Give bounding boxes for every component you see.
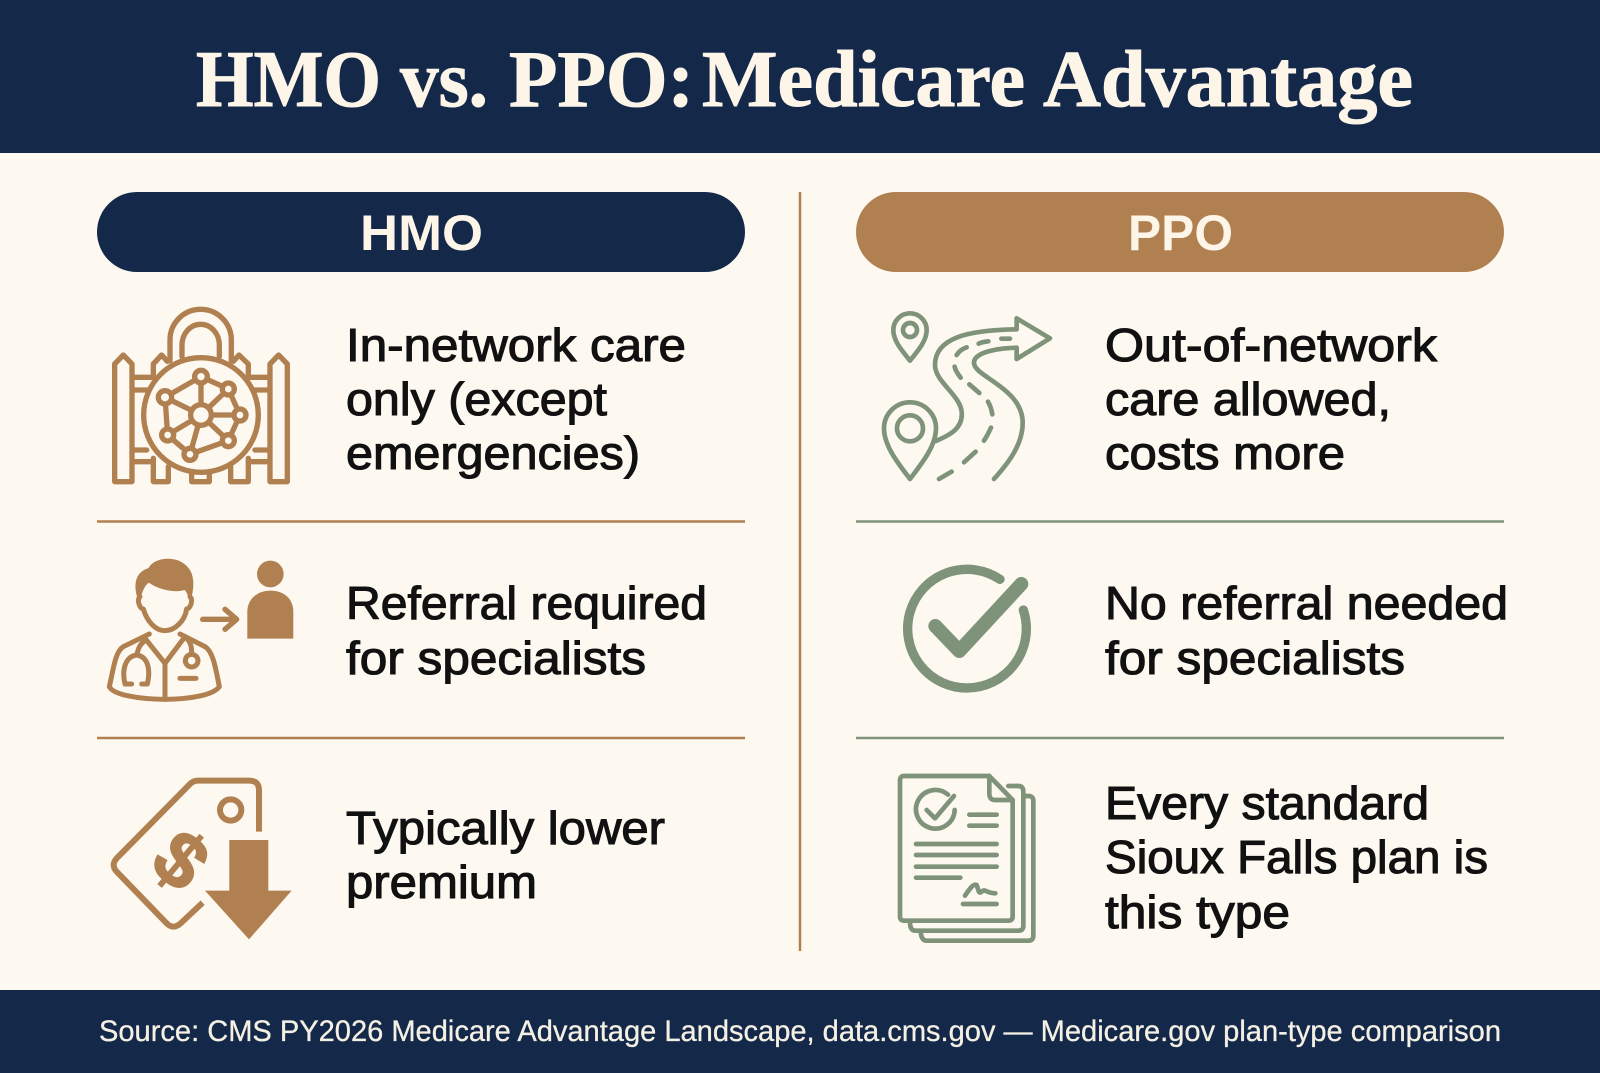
- text: no referral needed: [1105, 577, 1508, 684]
- text: typically lower premium: premium: [346, 856, 537, 908]
- text: typically lower premium: [346, 802, 665, 908]
- icon: price tag with down arrow: $: [136, 812, 226, 908]
- text: out-of-network care: costs more: [1105, 427, 1345, 479]
- text: out-of-network care: [1105, 319, 1438, 479]
- text: typically lower premium: Typically lower: [346, 802, 665, 854]
- icon: padlocked network fence: [115, 309, 287, 482]
- text: referral required: for specialists: [346, 632, 646, 684]
- panel: PPO: [856, 192, 1508, 941]
- panel: HMO: [97, 192, 745, 939]
- central divider: [799, 192, 801, 951]
- footer band with source: [0, 990, 1600, 1073]
- title: PPO:: [509, 36, 694, 124]
- title: HMO: [196, 36, 381, 124]
- text: out-of-network care: care allowed,: [1105, 373, 1391, 425]
- PPO heading pill: [856, 192, 1504, 272]
- HMO heading pill: [97, 192, 745, 272]
- icon: stacked plan documents: [900, 776, 1033, 941]
- text: no referral needed: No referral needed: [1105, 577, 1508, 629]
- title: Medicare: [702, 36, 1025, 124]
- text: out-of-network care: Out-of-network: [1105, 319, 1438, 371]
- title: vs.: [400, 36, 488, 124]
- HMO heading pill: HMO: [360, 205, 483, 261]
- text: every standard plan: this type: [1105, 886, 1290, 938]
- icon: doctor referring to specialist: [109, 559, 293, 699]
- header band with title: [0, 0, 1600, 153]
- text: no referral needed: for specialists: [1105, 632, 1405, 684]
- text: in-network care: In-network care: [346, 319, 686, 371]
- icon: check mark in circle: [908, 569, 1026, 688]
- icon: winding road with map pins: [884, 313, 1050, 479]
- text: referral required: [346, 577, 707, 684]
- text: referral required: Referral required: [346, 577, 707, 629]
- text: in-network care: only (except: [346, 373, 607, 425]
- PPO heading pill: PPO: [1128, 205, 1233, 261]
- source line: Source: CMS PY2026 Medicare Advantage Landscape, data.cms.gov — Medicare.gov plan-type comparison: [99, 1015, 1501, 1048]
- title: Advantage: [1043, 36, 1413, 124]
- text: in-network care: [346, 319, 686, 479]
- icon: price tag with down arrow: [114, 781, 292, 939]
- text: every standard plan: [1105, 777, 1488, 938]
- text: every standard plan: Every standard: [1105, 777, 1429, 829]
- text: every standard plan: Sioux Falls plan is: [1105, 831, 1488, 883]
- text: in-network care: emergencies): [346, 427, 640, 479]
